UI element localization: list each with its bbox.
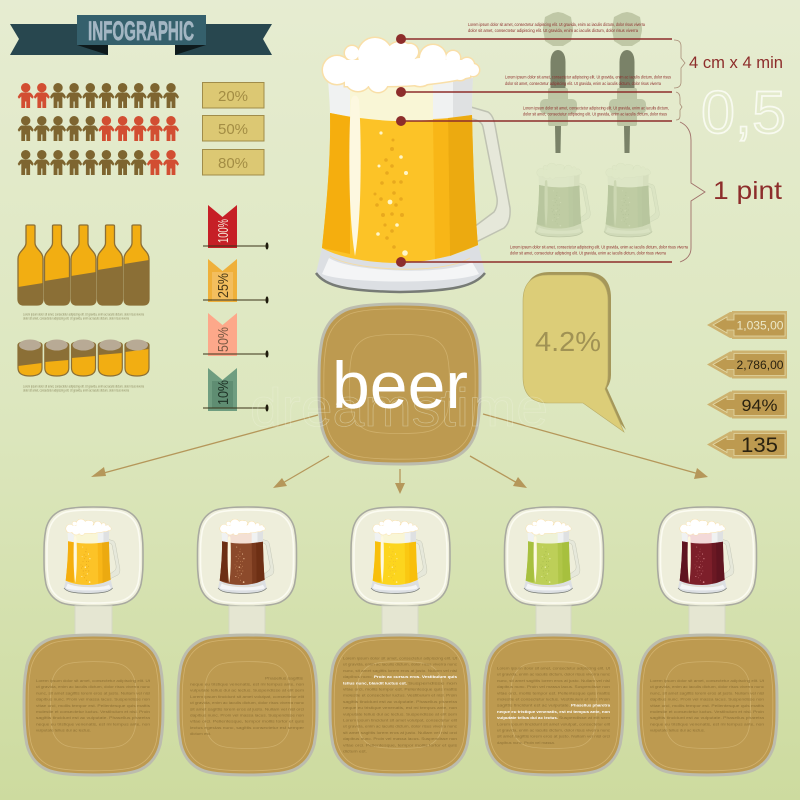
column 2: text board: vulputate tellus dui ac lectus. Suspendisse at elit sem bbox=[190, 688, 305, 693]
column 1: text board: ut gravida, enim ac iaculis dictum, dolor risus viverra nunc bbox=[36, 684, 150, 689]
column 3: text board: Lorem ipsum dolor sit amet, consectetur adipiscing elit. Ut bbox=[343, 656, 458, 660]
percentage box 50% bbox=[202, 116, 264, 141]
column 4: connector bbox=[536, 606, 571, 635]
arrow to mug 5 bbox=[483, 414, 708, 479]
column 2: text board: neque eu tristique venenatis, est mi tempus ante, non bbox=[190, 682, 304, 686]
brace: 1 pint bbox=[680, 122, 705, 262]
column 1: text board: sagittis tincidunt est ac vulputate. Phasellus pharetra bbox=[36, 715, 151, 720]
column 4: text board: vitae orci, mollis tempor est. Pellentesque quis mattis bbox=[497, 690, 610, 695]
column 5: text board: sagittis tincidunt est ac vulputate. Phasellus pharetra bbox=[650, 715, 765, 720]
column 4: text board: dapibus nunc. Proin vel massa lacus. Suspendisse non bbox=[497, 684, 610, 689]
column 1: text board: Lorem ipsum dolor sit amet, consectetur adipiscing elit. Ut bbox=[36, 678, 151, 683]
tag 2,786,00: 2,786,00 bbox=[736, 358, 784, 372]
column 4: text board: Lorem ipsum dolor sit amet, consectetur adipiscing elit. Ut bbox=[497, 666, 611, 670]
tag 2,786,00 bbox=[707, 350, 787, 378]
callout line: foam bbox=[396, 22, 672, 44]
bookmark 25%: 25% bbox=[215, 273, 232, 298]
column 3: text board bbox=[330, 635, 470, 775]
callout line: beer level: dolor sit amet, consectetur adipiscing elit. Ut gravida, enim ac iaculis dictum, dolor risus bbox=[523, 112, 667, 116]
arrow to mug 2 bbox=[273, 456, 329, 488]
bookmark 50% bbox=[203, 313, 268, 358]
column 5: text board: dapibus nunc. Proin vel massa lacus. Suspendisse non bbox=[650, 697, 764, 702]
bubble value: 4.2% bbox=[535, 326, 601, 357]
column 2: text board: Phasellus sagittis bbox=[265, 676, 303, 680]
column 3: connector bbox=[382, 606, 418, 635]
column 1: text board: vulputate tellus dui ac lectus. bbox=[36, 728, 91, 733]
beer tap 2 bbox=[609, 12, 646, 153]
arrow to mug 1 bbox=[91, 415, 318, 477]
column 4: text board bbox=[484, 635, 623, 775]
column 3: text board: tellus nunc, blandit luctus est. bbox=[343, 680, 407, 685]
column 5: text board: vitae orci, mollis tempor est. Pellentesque quis mattis bbox=[650, 703, 764, 708]
column 2: text board: ut gravida, enim ac iaculis dictum, dolor risus viverra nunc bbox=[190, 700, 304, 705]
tag 135 bbox=[707, 430, 787, 458]
bottles caption: Lorem ipsum dolor sit amet, consectetur adipiscing elit. Ut gravida, enim ac iaculis dictum, dolor risus viverra bbox=[23, 312, 144, 316]
column 4: text board: ut gravida, enim ac iaculis dictum, dolor risus viverra nunc bbox=[497, 728, 610, 732]
tag 1,035,00 bbox=[707, 311, 787, 339]
column 5: text board bbox=[638, 635, 777, 775]
measure label: 4 cm x 4 min: 4 cm x 4 min bbox=[689, 53, 783, 72]
central heading: beer bbox=[332, 348, 468, 422]
column 3: text board: Lorem ipsum tincidunt sit amet volutpat, consectetur elit bbox=[343, 718, 458, 722]
column 3: text board: dictum est. bbox=[343, 748, 367, 754]
column 2: mug card bbox=[198, 507, 296, 606]
callout line: foam: dolor sit amet, consectetur adipiscing elit. Ut gravida, enim ac iaculis dictum, dolor risus viverra bbox=[468, 28, 639, 33]
callout line: head: Lorem ipsum dolor sit amet, consectetur adipiscing elit. Ut gravida, enim ac iaculis dictum, dolor risus bbox=[505, 74, 671, 80]
percentage box 20%: 20% bbox=[218, 88, 248, 105]
cans caption: dolor sit amet, consectetur adipiscing elit. Ut gravida, enim ac iaculis dictum, dolor risus viverra bbox=[23, 388, 129, 392]
column 5: text board: molestie et consectetur luctus. Vestibulum et nisl. Proin bbox=[650, 709, 764, 714]
column 2: text board: lectus egestas nunc, sagittis consectetur est semper bbox=[190, 725, 305, 730]
percentage box 80%: 80% bbox=[218, 155, 248, 172]
callout line: head bbox=[396, 74, 672, 97]
watermark: dreamstime bbox=[250, 378, 548, 438]
measure label: 1 pint: 1 pint bbox=[713, 177, 782, 205]
column 1: text board: neque eu tristique venenatis, est mi tempus ante, non bbox=[36, 721, 150, 726]
column 5: text board: ut gravida, enim ac iaculis dictum, dolor risus viverra nunc bbox=[650, 684, 764, 689]
column 3: text board: dapibus nunc. Proin vel massa lacus. Suspendisse non bbox=[343, 736, 457, 741]
callout line: base: Lorem ipsum dolor sit amet, consectetur adipiscing elit. Ut gravida, enim ac iaculis dictum, dolor risus viverra bbox=[510, 244, 689, 250]
cans caption bbox=[23, 384, 144, 392]
cans caption: Lorem ipsum dolor sit amet, consectetur adipiscing elit. Ut gravida, enim ac iaculis dictum, dolor risus viverra bbox=[23, 384, 144, 388]
bookmark 10%: 10% bbox=[215, 380, 232, 405]
bookmark 100% bbox=[203, 205, 268, 250]
column 5: text board: nunc, sit amet sagittis lorem eros at justo. Nullam vel nisl bbox=[650, 690, 764, 695]
column 1: text board: molestie et consectetur luctus. Vestibulum et nisl. Proin bbox=[36, 709, 150, 714]
column 1: text board bbox=[24, 635, 163, 775]
callout line: beer level bbox=[396, 106, 672, 126]
column 2: text board bbox=[178, 635, 317, 775]
column 5: text board: Lorem ipsum dolor sit amet, consectetur adipiscing elit. Ut bbox=[650, 678, 765, 683]
column 3: text board: nunc, sit amet sagittis lorem eros at justo. Nullam vel nisl bbox=[343, 668, 457, 673]
column 5: text board: neque eu tristique venenatis, est mi tempus ante, non bbox=[650, 721, 764, 726]
bookmark 100%: 100% bbox=[215, 219, 232, 243]
column 4: text board: molestie et consectetur luctus. Vestibulum et nisl. Proin bbox=[497, 696, 610, 702]
column 4: text board: Phasellus pharetra bbox=[571, 703, 611, 708]
central beer board bbox=[319, 304, 480, 464]
percentage box 50%: 50% bbox=[218, 121, 248, 138]
column 4: text board: neque eu tristique venenatis, est mi tempus ante, non bbox=[497, 709, 611, 714]
callout line: head: dolor sit amet, consectetur adipiscing elit. Ut gravida, enim ac iaculis dictum, dolor risus viverra bbox=[505, 81, 662, 86]
column 4: text board: sagittis tincidunt est ac vulputate. bbox=[497, 703, 570, 708]
people row: 20% bbox=[18, 83, 179, 108]
column 3: text board: sagittis tincidunt est ac vulputate. Phasellus pharetra bbox=[343, 699, 458, 704]
bottles caption bbox=[23, 312, 144, 320]
column 5: connector bbox=[689, 606, 725, 635]
brace: 4 cm x 4 min bbox=[674, 40, 685, 88]
callout line: beer level: Lorem ipsum dolor sit amet, consectetur adipiscing elit. Ut gravida, enim ac iaculis dictum, bbox=[523, 106, 669, 110]
column 3: text board: dapibus nunc. bbox=[343, 674, 373, 679]
tag 1,035,00: 1,035,00 bbox=[736, 318, 784, 332]
column 1: connector bbox=[75, 606, 112, 635]
percentage box 80% bbox=[202, 150, 264, 175]
column 3: text board: vitae orci. Pellentesque, tempor mollis tortor et quis bbox=[343, 742, 457, 747]
title: INFOGRAPHIC bbox=[88, 16, 194, 46]
column 4: mug card bbox=[504, 507, 604, 606]
column 5: mug card bbox=[658, 507, 756, 606]
column 3: text board: ut gravida, enim ac iaculis dictum, dolor risus viverra nunc bbox=[343, 662, 457, 667]
column 3: mug card bbox=[351, 507, 450, 606]
brace: 0,5 bbox=[676, 92, 682, 120]
bookmark 50%: 50% bbox=[215, 327, 232, 352]
bookmark 10% bbox=[203, 368, 268, 412]
column 3: text board: vulputate tellus dui ac lectus. Suspendisse at elit sem bbox=[343, 711, 458, 716]
column 1: text board: dapibus nunc. Proin vel massa lacus. Suspendisse non bbox=[36, 697, 150, 702]
column 2: text board: vitae orci. Pellentesque, tempor mollis tortor et quis bbox=[190, 719, 304, 724]
speech bubble bbox=[523, 272, 626, 432]
column 2: text board: dapibus nunc. Proin vel massa lacus. Suspendisse non bbox=[190, 712, 304, 718]
main beer mug bbox=[316, 38, 510, 292]
column 3: text board: neque eu tristique venenatis, est mi tempus ante, non bbox=[343, 705, 457, 710]
ghost mug 2 bbox=[604, 163, 659, 237]
percentage box 20% bbox=[202, 82, 264, 108]
callout line: foam: Lorem ipsum dolor sit amet, consectetur adipiscing elit. Ut gravida, enim ac iaculis dictum, dolor risus viverra bbox=[468, 22, 646, 27]
column 3: text board: Suspendisse non bbox=[408, 680, 457, 685]
column 3: text board: ut gravida, enim ac iaculis dictum, dolor risus viverra nunc bbox=[343, 724, 457, 729]
bottles caption: dolor sit amet, consectetur adipiscing elit. Ut gravida, enim ac iaculis dictum, dolor risus viverra bbox=[23, 316, 129, 320]
column 4: text board: dapibus nunc. Proin vel massa. bbox=[497, 740, 555, 745]
arrow to mug 3 bbox=[395, 469, 405, 494]
column 2: text board: dictum est. bbox=[190, 731, 211, 736]
column 3: text board: molestie et consectetur luctus. Vestibulum et nisl. Proin bbox=[343, 693, 457, 698]
arrow to mug 4 bbox=[470, 456, 527, 488]
column 1: text board: vitae orci, mollis tempor est. Pellentesque quis mattis bbox=[36, 703, 150, 708]
cans chart bbox=[18, 339, 149, 376]
callout line: base bbox=[396, 244, 689, 267]
column 4: text board: ut gravida, enim ac iaculis dictum, dolor risus viverra nunc bbox=[497, 672, 610, 677]
measure label: 0,5: 0,5 bbox=[701, 79, 786, 146]
tag 94% bbox=[707, 390, 787, 418]
column 4: text board: vulputate tellus dui ac lectus. bbox=[497, 715, 558, 720]
column 1: mug card bbox=[44, 507, 143, 606]
tag 135: 135 bbox=[741, 434, 778, 457]
column 1: text board: nunc, sit amet sagittis lorem eros at justo. Nullam vel nisl bbox=[36, 690, 150, 695]
column 3: text board: sit amet sagittis lorem eros at justo. Nullam vel nisl orci bbox=[343, 730, 457, 735]
people row: 50% bbox=[18, 116, 179, 141]
tag 94%: 94% bbox=[742, 396, 778, 415]
column 3: text board: vitae orci, mollis tempor est. Pellentesque quis mattis bbox=[343, 686, 457, 692]
people row: 80% bbox=[18, 150, 179, 175]
beer tap 1 bbox=[540, 12, 577, 153]
column 3: text board: Proin ac cursus eros. Vestibulum quis bbox=[374, 674, 458, 679]
column 4: text board: Suspendisse at elit sem bbox=[559, 715, 611, 720]
column 2: text board: Lorem ipsum tincidunt sit amet volutpat, consectetur elit bbox=[190, 694, 305, 699]
bookmark 25% bbox=[203, 259, 268, 304]
column 2: connector bbox=[229, 606, 265, 635]
column 2: text board: sit amet sagittis lorem eros at justo. Nullam vel nisl orci bbox=[190, 706, 304, 711]
callout line: base: dolor sit amet, consectetur adipiscing elit. Ut gravida, enim ac iaculis dictum, dolor risus viverra bbox=[510, 250, 667, 256]
bottles chart bbox=[18, 225, 149, 305]
column 4: text board: Lorem ipsum tincidunt sit amet volutpat, consectetur elit bbox=[497, 721, 611, 726]
ghost mug 1 bbox=[535, 163, 590, 237]
column 4: text board: nunc, sit amet sagittis lorem eros at justo. Nullam vel nisl bbox=[497, 678, 610, 683]
ribbon banner bbox=[10, 15, 272, 55]
column 4: text board: sit amet sagittis lorem eros at justo. Nullam vel nisl orci bbox=[497, 734, 610, 739]
column 5: text board: vulputate tellus dui ac lectus. bbox=[650, 728, 705, 733]
